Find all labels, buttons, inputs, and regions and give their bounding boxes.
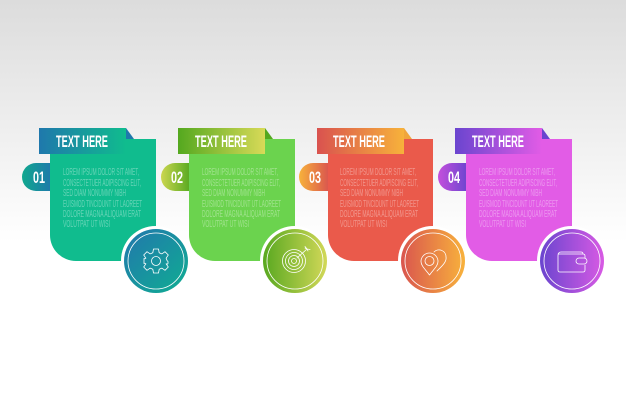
panel: step 02	[161, 128, 329, 295]
text block 01: VOLUTPAT UT WISI	[63, 219, 110, 230]
icon circle: map pins	[398, 226, 467, 295]
text block 03: SED DIAM NONUMMY NIBH	[340, 188, 403, 199]
card body 03	[328, 139, 433, 261]
text block 03	[340, 167, 419, 230]
panel: step 02: LOREM IPSUM DOLOR SIT AMET,	[202, 167, 278, 178]
number tab 01: 01	[33, 169, 45, 187]
panel: step 02: DOLORE MAGNA ALIQUAM ERAT	[202, 209, 280, 220]
ribbon fold 01	[126, 128, 134, 139]
text block 04: VOLUTPAT UT WISI	[479, 219, 526, 230]
panel: step 03: DOLORE MAGNA ALIQUAM ERAT	[340, 209, 418, 220]
card body 01	[50, 139, 156, 261]
panel: step 01	[22, 128, 190, 295]
panel: step 04	[438, 128, 606, 295]
text block 04	[479, 167, 558, 230]
ribbon heading 04	[455, 128, 542, 154]
text block 02: SED DIAM NONUMMY NIBH	[202, 188, 265, 199]
panel: step 03: LOREM IPSUM DOLOR SIT AMET,	[340, 167, 416, 178]
card body 02	[189, 139, 295, 261]
panel: step 02: CONSECTETUER ADIPISCING ELIT,	[202, 178, 280, 189]
ribbon heading 02	[178, 128, 265, 154]
icon circle: wallet	[537, 226, 606, 295]
text block 03: VOLUTPAT UT WISI	[340, 219, 387, 230]
icon circle: gear	[121, 226, 190, 295]
text block 04: SED DIAM NONUMMY NIBH	[479, 188, 542, 199]
icon circle: target	[260, 226, 329, 295]
text block 02	[202, 167, 281, 230]
number tab 04: 04	[448, 169, 461, 187]
panel: step 03: EUISMOD TINCIDUNT UT LAOREET	[340, 199, 419, 210]
ribbon fold 04	[542, 128, 550, 139]
ribbon fold 03	[404, 128, 412, 139]
panel: step 01: CONSECTETUER ADIPISCING ELIT,	[63, 178, 141, 189]
panel: step 02: EUISMOD TINCIDUNT UT LAOREET	[202, 199, 281, 210]
ribbon heading 01	[39, 128, 126, 154]
number tab 01	[22, 163, 52, 191]
number tab 03	[299, 163, 330, 191]
card body 04	[466, 139, 572, 261]
ribbon heading 03	[317, 128, 404, 154]
panel: step 03	[299, 128, 467, 295]
ribbon fold 02	[265, 128, 273, 139]
panel: step 03: CONSECTETUER ADIPISCING ELIT,	[340, 178, 418, 189]
text block 01	[63, 167, 142, 230]
number tab 02: 02	[171, 169, 183, 187]
text block 02: VOLUTPAT UT WISI	[202, 219, 249, 230]
number tab 02	[161, 163, 191, 191]
ribbon heading 04: TEXT HERE	[472, 133, 524, 151]
panel: step 01: DOLORE MAGNA ALIQUAM ERAT	[63, 209, 141, 220]
ribbon heading 01: TEXT HERE	[56, 133, 108, 151]
panel: step 01: LOREM IPSUM DOLOR SIT AMET,	[63, 167, 139, 178]
ribbon heading 02: TEXT HERE	[195, 133, 247, 151]
text block 01: SED DIAM NONUMMY NIBH	[63, 188, 126, 199]
panel: step 01: EUISMOD TINCIDUNT UT LAOREET	[63, 199, 142, 210]
number tab 04	[438, 163, 468, 191]
ribbon heading 03: TEXT HERE	[333, 133, 385, 151]
number tab 03: 03	[309, 169, 321, 187]
